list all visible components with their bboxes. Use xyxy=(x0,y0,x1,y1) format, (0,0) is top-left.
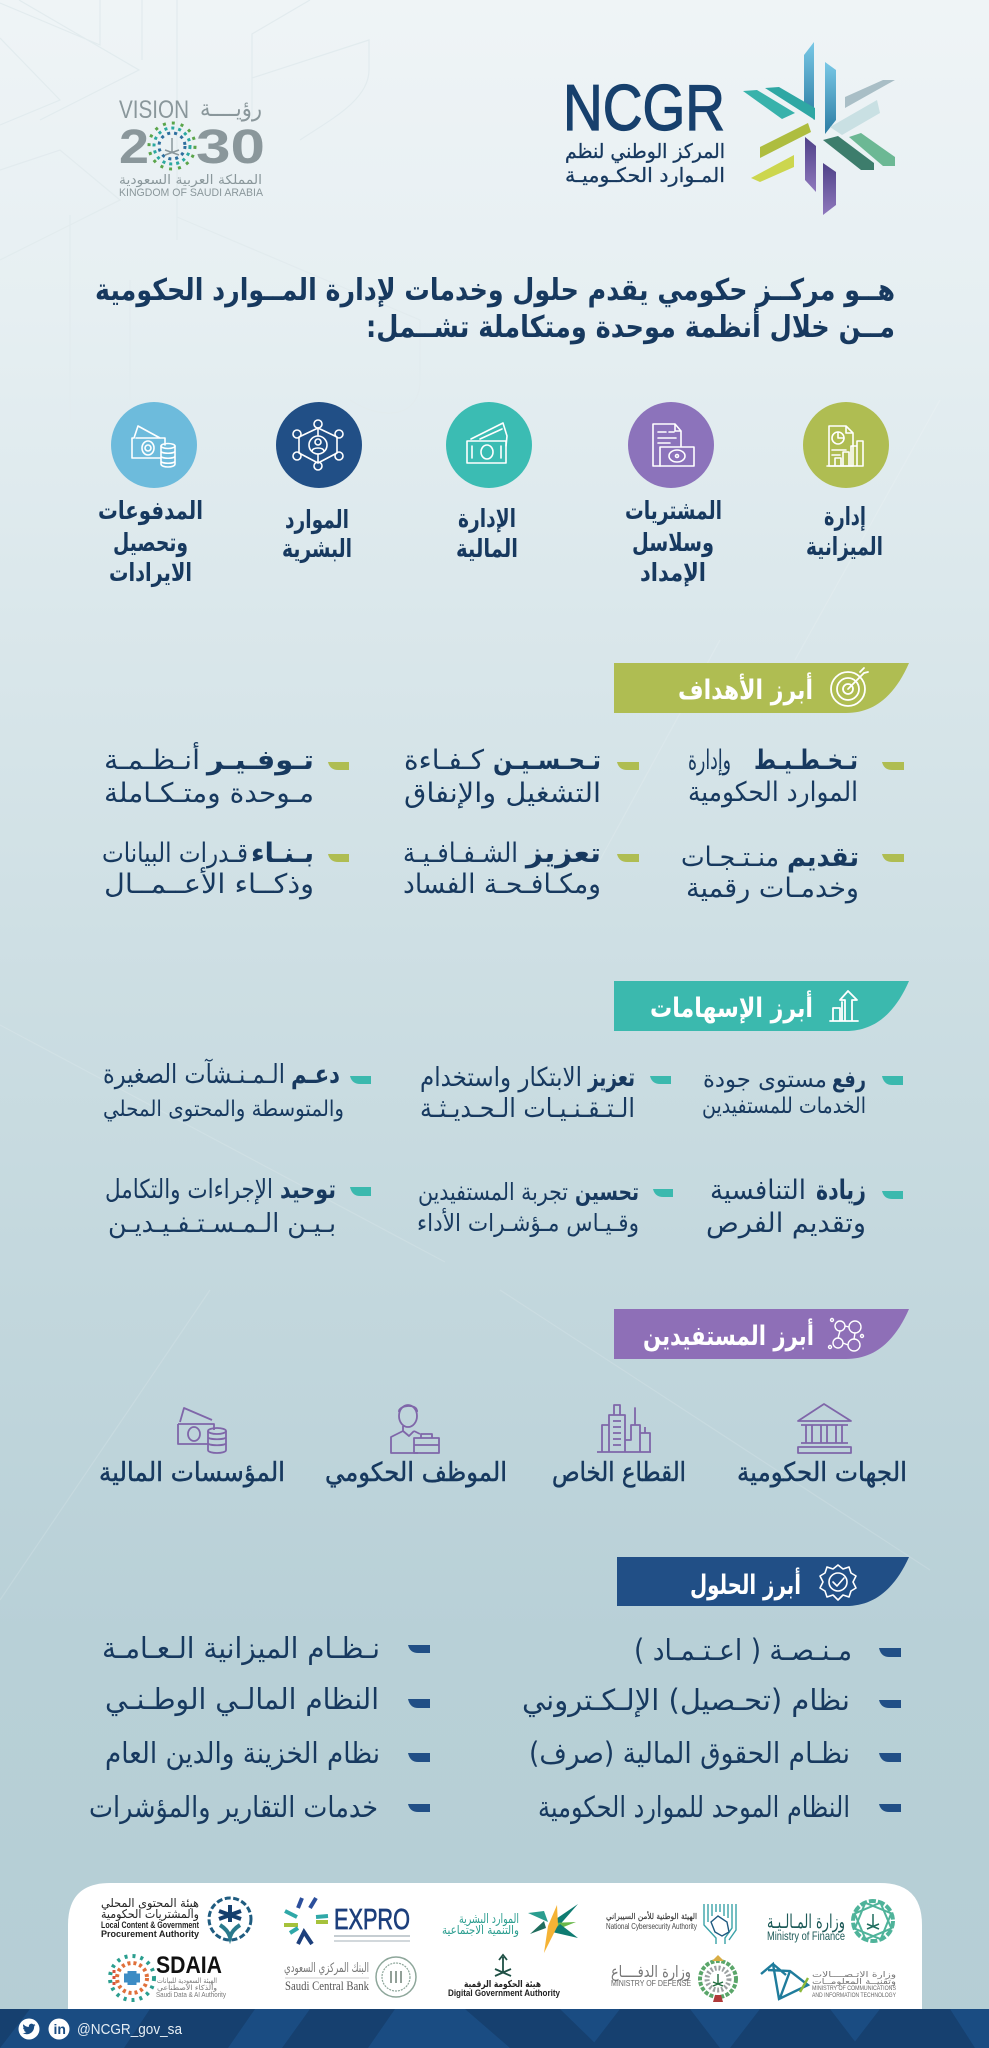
logo: Saudi Central Bank: Saudi Central Bank xyxy=(285,1978,369,1993)
beneficiary: government entities: الجهات الحكومية xyxy=(737,1458,907,1488)
logo: SDAIA xyxy=(110,1952,226,2000)
beneficiary: financial institutions xyxy=(99,1408,285,1488)
item: human resources: البشرية xyxy=(282,534,352,564)
contribution: competitiveness xyxy=(706,1175,903,1239)
item: human resources xyxy=(276,402,362,564)
goal: digital products xyxy=(681,842,904,904)
kingdom arabic: المملكة العربية السعودية xyxy=(119,173,262,188)
item: procurement and supply chains: وسلاسل xyxy=(632,528,714,558)
beneficiary: private sector: القطاع الخاص xyxy=(552,1458,686,1488)
panel: solutions xyxy=(89,1557,909,1824)
goal: data capabilities xyxy=(102,838,349,900)
banner: contributions xyxy=(614,981,909,1031)
logo: National Cybersecurity Authority: National Cybersecurity Authority xyxy=(606,1921,698,1931)
contribution: SMEs: الـمـنـشآت الصغيرة xyxy=(103,1058,285,1090)
logo: Human Resources ministry xyxy=(442,1904,578,1953)
item: financial management xyxy=(446,402,532,563)
logo: Local Content and Government Procurement Authority: Procurement Authority xyxy=(101,1929,200,1940)
logo arabic name: المركز الوطني لنظم xyxy=(565,139,725,164)
logo: National Cybersecurity Authority: الهيئة الوطنية للأمن السيبراني xyxy=(606,1911,697,1921)
social handle: @NCGR_gov_sa xyxy=(77,2021,183,2038)
banner: beneficiaries xyxy=(614,1309,909,1359)
vision word: VISION xyxy=(119,96,189,124)
item: financial management: الإدارة xyxy=(458,504,516,533)
solution: Sarf: نظـام الحقوق المالية (صرف) xyxy=(529,1736,850,1770)
vision arabic word: رؤيــــة xyxy=(200,96,262,122)
logo wordmark: NCGR xyxy=(563,71,725,144)
item: payments and revenue collection xyxy=(98,402,203,588)
logo: Local Content and Government Procurement Authority: هيئة المحتوى المحلي xyxy=(101,1896,199,1911)
banner: solutions: أبرز الحلول xyxy=(690,1567,801,1601)
logo: EXPRO xyxy=(284,1898,410,1944)
item: budget management xyxy=(803,402,889,562)
banner: solutions xyxy=(617,1557,909,1606)
icon: twitter xyxy=(18,2018,40,2040)
background pattern lines xyxy=(0,0,940,1600)
contribution: service quality xyxy=(702,1067,903,1119)
goal: transparency: ومكـافـحـة الفساد xyxy=(403,869,601,900)
goal: planning xyxy=(688,745,904,808)
contribution: innovation: الـتـقـنـيـات الـحـديـثـة xyxy=(420,1094,635,1124)
solution: Etimad platform: مـنـصـة ( اعـتـمـاد ) xyxy=(634,1633,852,1667)
logo: Digital Government Authority: هيئة الحكومة الرقمية xyxy=(464,1979,541,1990)
2030 numerals xyxy=(119,121,265,174)
icon: linkedin: in xyxy=(54,2021,66,2037)
logo arabic name: المـوارد الحكـوميـة xyxy=(565,163,725,187)
2030 numerals: 2 xyxy=(119,121,149,174)
beneficiary: government employee: الموظف الحكومي xyxy=(325,1458,507,1488)
logo: Digital Government Authority xyxy=(448,1955,560,1998)
solution: national financial system: النظام المالـي الوطـنـي xyxy=(105,1682,379,1717)
panel: beneficiaries xyxy=(99,1309,909,1488)
contribution: innovation: الابتكار واستخدام xyxy=(420,1063,582,1093)
goal: efficiency: كـفـاءة xyxy=(404,745,484,776)
contribution: beneficiary experience: وقـيـاس مـؤشـرات الأداء xyxy=(417,1208,639,1237)
kingdom english: KINGDOM OF SAUDI ARABIA xyxy=(119,187,264,199)
item: human resources: الموارد xyxy=(285,505,349,535)
goal: planning: تـخـطـيـط xyxy=(754,745,858,776)
contribution: SMEs: دعـم xyxy=(291,1060,340,1090)
logo arabic name xyxy=(565,139,725,187)
panel: goals xyxy=(102,663,909,904)
logo: Ministry of Communications: وتقنيــة المعلومــات xyxy=(812,1977,896,1986)
logo: SDAIA: الهيئة السعودية للبيانات xyxy=(157,1977,217,1985)
headline xyxy=(95,273,895,345)
footer chevron pattern xyxy=(0,2009,975,2048)
logo: Ministry of Finance: وزارة المـالـيـة xyxy=(767,1911,845,1933)
logo star xyxy=(743,42,895,215)
logo: Local Content and Government Procurement Authority: Local Content & Government xyxy=(101,1920,200,1931)
goal: unified systems: مـوحدة ومتـكـاملة xyxy=(104,778,314,809)
goal: data capabilities: قـدرات البيانات xyxy=(102,838,248,869)
logo: Ministry of Finance xyxy=(767,1901,893,1943)
banner: goals xyxy=(614,663,909,713)
goal: unified systems: تـوفـيـر xyxy=(205,745,314,776)
palm emblem dots xyxy=(149,123,195,169)
contribution: service quality: الخدمات للمستفيدين xyxy=(702,1094,866,1119)
contribution: innovation xyxy=(420,1063,671,1124)
contribution: service quality: رفع xyxy=(832,1067,866,1093)
logo: Ministry of Defense: وزارة الدفــــاع xyxy=(611,1962,691,1982)
logo: Saudi Central Bank xyxy=(284,1957,416,1997)
logo: Ministry of Communications: AND INFORMATION TECHNOLOGY xyxy=(812,1993,896,1999)
logo: Ministry of Defense xyxy=(611,1955,736,2002)
goal: digital products: وخدمـات رقمية xyxy=(686,873,859,904)
contribution: unifying procedures: توحيد xyxy=(280,1175,336,1205)
NCGR logo xyxy=(563,42,895,215)
contribution: competitiveness: زيادة xyxy=(816,1175,866,1206)
solution: Tahseel: نظام (تحـصيل) الإلـكـتروني xyxy=(522,1683,850,1718)
goal: efficiency: التشغيل والإنفاق xyxy=(404,778,601,809)
contribution: unifying procedures: الإجراءات والتكامل xyxy=(105,1175,273,1205)
contribution: service quality: مستوى جودة xyxy=(703,1067,827,1093)
panel: contributions xyxy=(103,981,909,1239)
footer bar xyxy=(0,2009,989,2048)
contribution: SMEs: والمتوسطة والمحتوى المحلي xyxy=(103,1097,344,1122)
logo: EXPRO: EXPRO xyxy=(334,1904,410,1936)
goal: transparency xyxy=(403,838,639,900)
logo: Digital Government Authority: Digital Government Authority xyxy=(448,1988,560,1998)
logo: Ministry of Communications: MINISTRY OF COMMUNICATIONS xyxy=(812,1986,896,1992)
goal: unified systems: أنـظـمـة xyxy=(104,741,200,776)
icon: linkedin xyxy=(48,2018,70,2040)
goal: planning: الموارد الحكومية xyxy=(688,777,858,808)
goal: transparency: الشـفـافـيـة xyxy=(403,838,518,869)
contribution: beneficiary experience xyxy=(417,1178,673,1237)
goal: planning: وإدارة xyxy=(688,745,731,776)
panel: partner logos xyxy=(68,1883,922,2010)
banner: contributions: أبرز الإسهامات xyxy=(650,990,813,1024)
logo: Ministry of Defense: MINISTRY OF DEFENSE xyxy=(611,1979,691,1988)
goal: unified systems xyxy=(104,741,349,809)
goal: data capabilities: وذكــاء الأعــمــال xyxy=(104,866,314,900)
item: payments and revenue collection: وتحصيل xyxy=(113,528,188,558)
item: procurement and supply chains: المشتريات xyxy=(625,496,722,526)
2030 numerals: 30 xyxy=(196,121,265,174)
contribution: competitiveness: التنافسية xyxy=(710,1175,806,1206)
item: budget management: إدارة xyxy=(824,502,866,531)
logo: SDAIA: Saudi Data & AI Authority xyxy=(156,1990,226,1999)
goal: efficiency: تـحـسـيـن xyxy=(493,745,601,776)
goal: efficiency xyxy=(404,745,639,809)
logo: Local Content and Government Procurement Authority xyxy=(101,1896,251,1940)
logo: National Cybersecurity Authority xyxy=(606,1904,736,1944)
item: procurement and supply chains: الإمداد xyxy=(640,558,706,587)
beneficiary: private sector xyxy=(552,1405,686,1488)
logo: Human Resources ministry: والتنمية الاجتماعية xyxy=(442,1923,519,1938)
item: budget management: الميزانية xyxy=(806,532,883,562)
logo: Saudi Central Bank: البنك المركزي السعودي xyxy=(284,1961,369,1976)
contribution: unifying procedures: بـيـن الـمـسـتـفـيـديـن xyxy=(108,1209,336,1239)
goal: data capabilities: بـنـاء xyxy=(251,838,314,869)
solution: treasury: نظام الخزينة والدين العام xyxy=(105,1736,380,1770)
contribution: competitiveness: وتقديم الفرص xyxy=(706,1208,866,1239)
banner: beneficiaries: أبرز المستفيدين xyxy=(643,1318,814,1352)
contribution: beneficiary experience: تجربة المستفيدين xyxy=(418,1178,568,1206)
logo: SDAIA: SDAIA xyxy=(156,1952,222,1979)
logo: Ministry of Finance: Ministry of Finance xyxy=(767,1929,845,1943)
contribution: SMEs xyxy=(103,1058,371,1122)
logo: Ministry of Communications xyxy=(761,1964,896,1999)
panel: five systems xyxy=(98,402,889,588)
banner: goals: أبرز الأهداف xyxy=(678,672,813,706)
beneficiary: government employee xyxy=(325,1405,507,1488)
contribution: unifying procedures xyxy=(105,1175,371,1239)
Vision 2030 logo xyxy=(119,96,265,199)
item: payments and revenue collection: الايرادات xyxy=(109,558,192,588)
logo: Local Content and Government Procurement Authority: والمشتريات الحكومية xyxy=(101,1907,199,1922)
goal: digital products: منـتـجـات xyxy=(681,842,779,873)
solution: reports: خدمات التقارير والمؤشرات xyxy=(89,1790,378,1824)
solution: unified GRP system: النظام الموحد للموارد الحكومية xyxy=(538,1790,850,1824)
white card xyxy=(68,1883,922,2010)
logo: Human Resources ministry: الموارد البشرية xyxy=(459,1912,519,1927)
goal: digital products: تقديم xyxy=(787,842,859,873)
beneficiary: financial institutions: المؤسسات المالية xyxy=(99,1458,285,1488)
item: payments and revenue collection: المدفوعات xyxy=(98,496,203,526)
contribution: beneficiary experience: تحسين xyxy=(575,1178,639,1206)
goal: transparency: تعزيز xyxy=(524,838,601,869)
logo: SDAIA: والذكاء الاصطناعي xyxy=(157,1984,217,1992)
item: financial management: المالية xyxy=(456,534,518,563)
solution: general budget: نـظـام الميزانية الـعـامـة xyxy=(102,1631,380,1665)
item: procurement and supply chains xyxy=(625,402,722,587)
beneficiary: government entities xyxy=(737,1404,907,1488)
logo: Ministry of Communications: وزارة الاتـصــــالات xyxy=(812,1970,896,1979)
headline: مــن خلال أنظمة موحدة ومتكاملة تشــمل: xyxy=(366,307,895,345)
contribution: innovation: تعزيز xyxy=(587,1063,635,1093)
